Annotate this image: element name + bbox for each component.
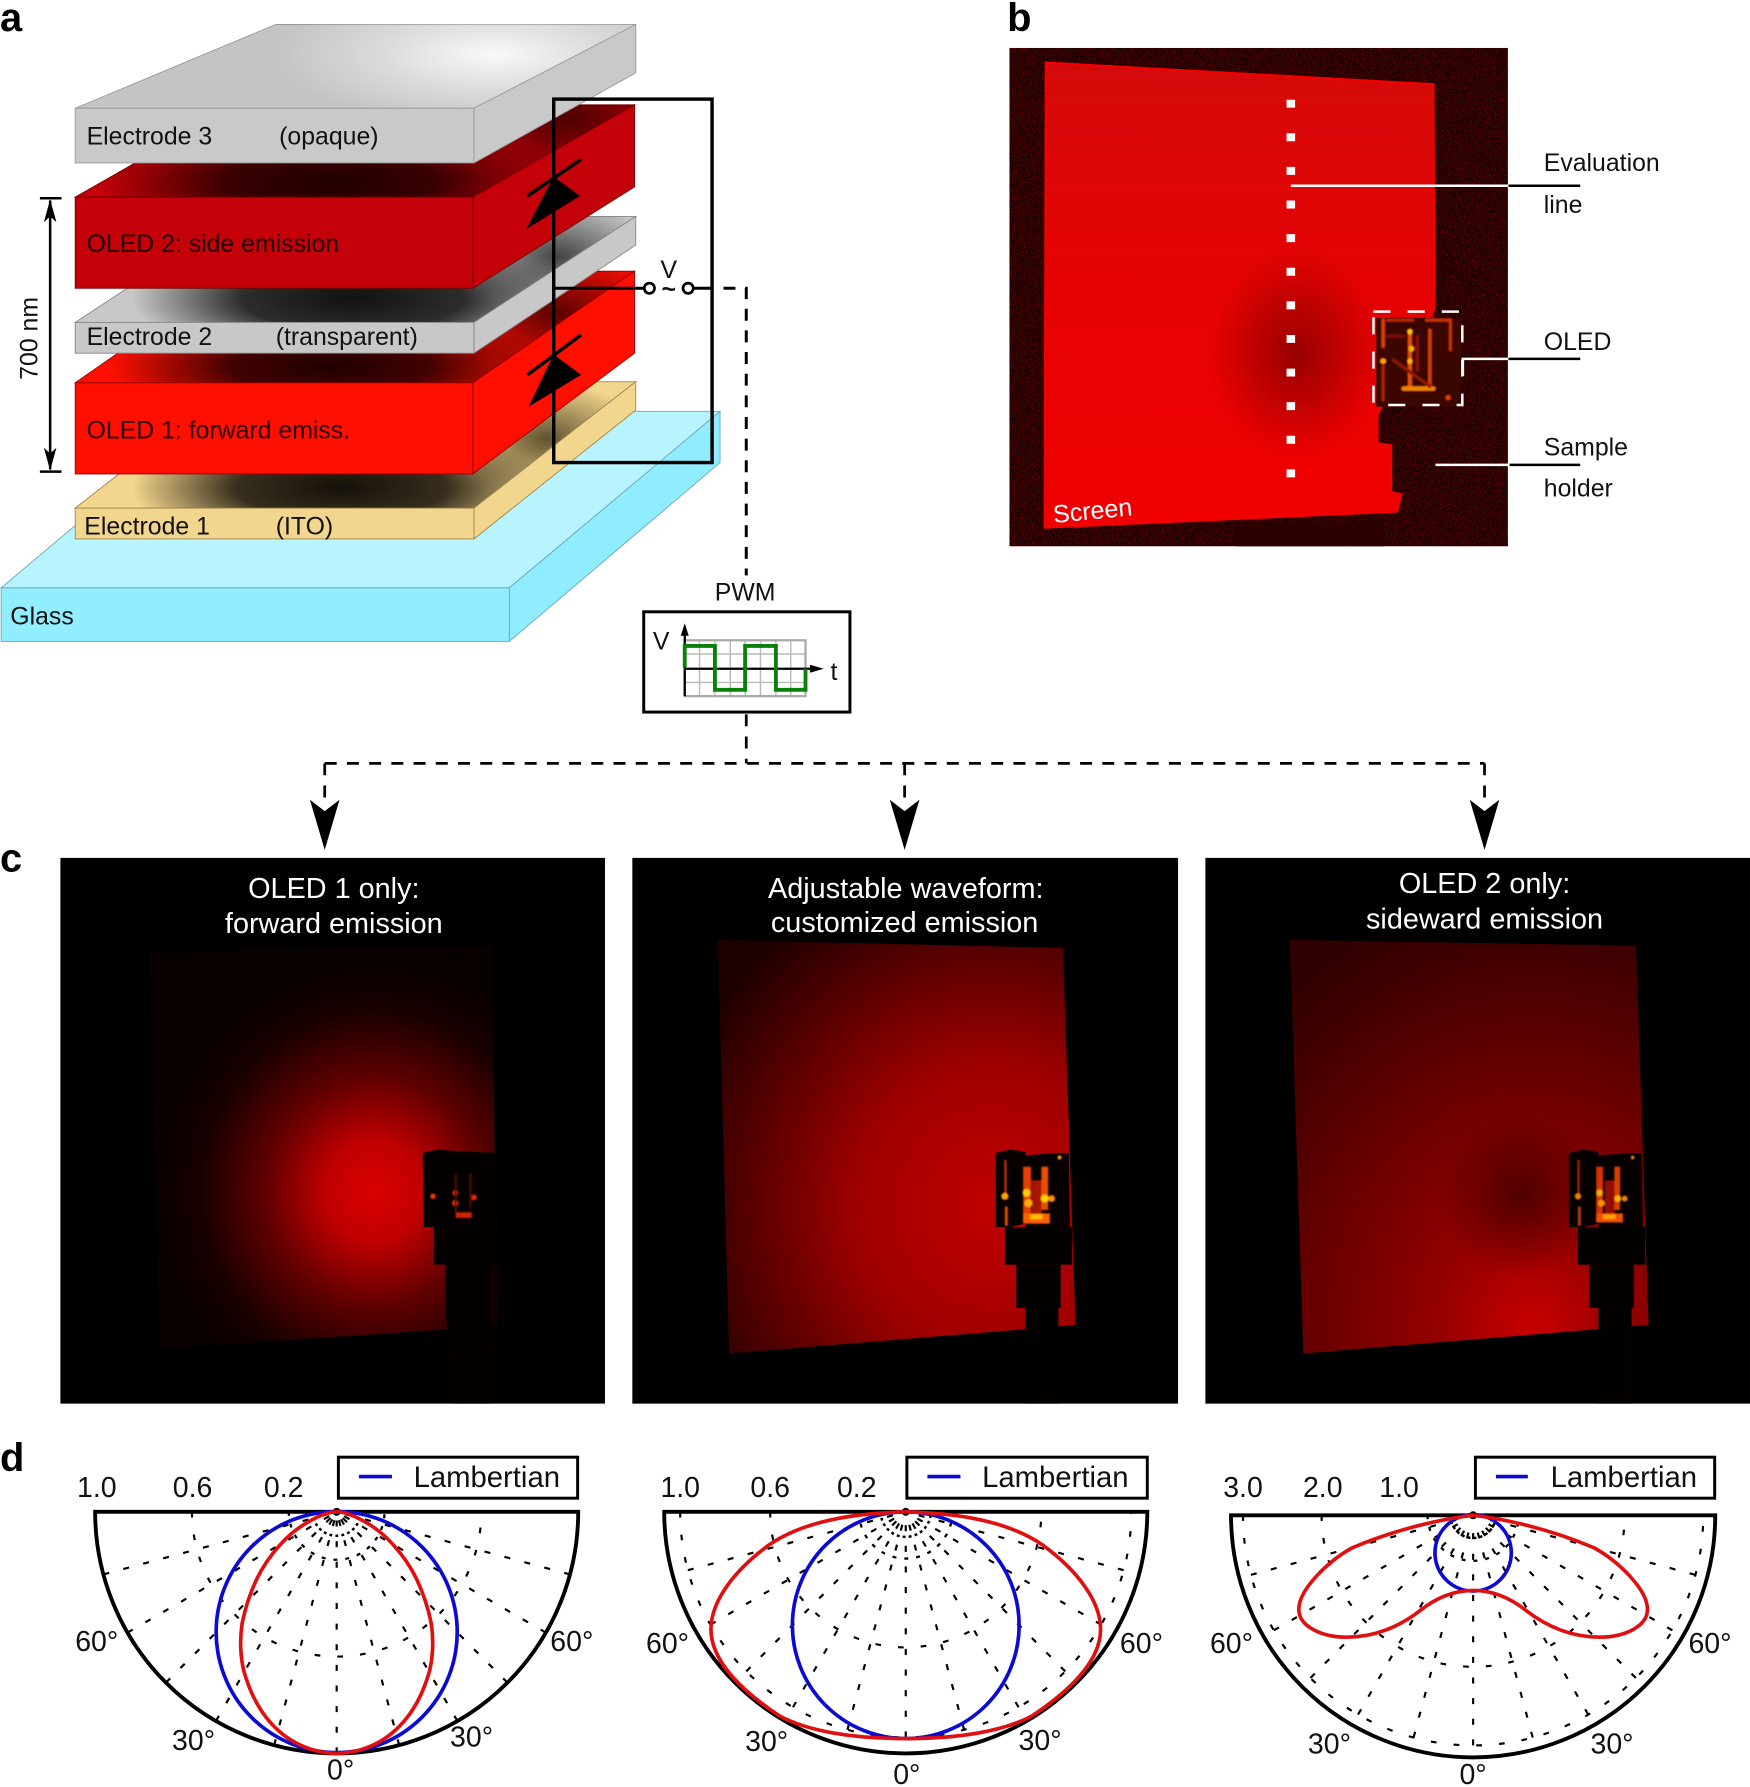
axis labels 2: 30° <box>1019 1725 1062 1757</box>
legend 1 <box>338 1457 578 1498</box>
axis labels 2: 60° <box>646 1628 689 1660</box>
axis labels 1: 60° <box>75 1626 118 1658</box>
outer frame 1 <box>95 1512 578 1753</box>
holder 2 <box>996 1150 1072 1404</box>
OLED device photo <box>1376 314 1461 407</box>
dashed box around OLED <box>1373 312 1462 405</box>
PWM box with waveform: t <box>831 659 838 686</box>
dimension: 700 nm: 700 nm <box>17 297 44 380</box>
circuit with diodes and voltage source <box>526 99 712 463</box>
circuit with diodes and voltage source: V <box>661 257 678 284</box>
legend 2 <box>907 1457 1147 1498</box>
circuit with diodes and voltage source: ~ <box>662 276 676 303</box>
measured curve 1 <box>241 1512 433 1753</box>
layer: electrode 2: Electrode 2 <box>87 324 212 351</box>
axis labels 3: 3.0 <box>1223 1472 1263 1504</box>
measured curve 3 <box>1299 1515 1647 1637</box>
panel c3: OLED 2 only photo: OLED 2 only: <box>1399 868 1570 900</box>
OLED device glow 3 <box>1575 1156 1634 1226</box>
panel label c: c <box>0 837 22 881</box>
legend 3 <box>1475 1457 1715 1498</box>
axis labels 3: 2.0 <box>1303 1472 1343 1504</box>
polar plot 2 <box>646 1457 1163 1787</box>
Lambertian curve 1 <box>216 1512 457 1753</box>
callout: sample holder: holder <box>1544 476 1613 503</box>
axis labels 2: 30° <box>745 1726 788 1758</box>
Lambertian curve 2 <box>792 1512 1019 1739</box>
polar grid 3 <box>1243 1511 1703 1745</box>
PWM box with waveform: V <box>653 628 670 655</box>
icon: diode OLED 2 <box>526 160 581 229</box>
polar plot 1 <box>75 1457 593 1787</box>
axis labels 3: 1.0 <box>1379 1472 1419 1504</box>
layer: electrode 3 <box>75 24 636 163</box>
callout: OLED <box>1463 329 1611 376</box>
panel c2: adjustable waveform photo: Adjustable waveform: <box>768 873 1043 905</box>
layer: OLED 2 <box>75 105 635 288</box>
axis labels 1 <box>75 1472 593 1787</box>
axis labels 2: 1.0 <box>660 1472 700 1504</box>
callout: OLED: OLED <box>1544 329 1611 356</box>
panel c2: adjustable waveform photo: customized emission <box>771 907 1038 939</box>
callout: sample holder: Sample <box>1544 435 1628 462</box>
layer: electrode 2 <box>75 216 636 353</box>
axis labels 1: 0° <box>327 1755 354 1787</box>
screen label: Screen <box>1052 493 1133 529</box>
axis labels 1: 0.2 <box>264 1472 303 1504</box>
layer: electrode 3: Electrode 3 <box>87 124 212 151</box>
arrow: to OLED 2 panel <box>1470 800 1499 850</box>
layer: electrode 1 <box>75 382 636 540</box>
callout: evaluation line: Evaluation <box>1544 150 1660 177</box>
arrow: to adjustable panel <box>890 800 919 850</box>
dashed distribution lines <box>325 714 1485 804</box>
PWM label: PWM <box>715 579 775 606</box>
evaluation line dots <box>1287 100 1295 477</box>
PWM box with waveform <box>644 612 850 712</box>
layer: glass: Glass <box>10 603 74 630</box>
axis labels 3: 60° <box>1688 1628 1732 1660</box>
panel label d: d <box>0 1436 24 1480</box>
layer: electrode 3: (opaque) <box>279 124 379 151</box>
dimension: 700 nm <box>17 198 62 472</box>
layer: electrode 1: Electrode 1 <box>84 513 210 540</box>
axis labels 1: 1.0 <box>77 1472 117 1504</box>
holder 1 <box>423 1150 501 1404</box>
panel c1: OLED 1 only photo: forward emission <box>225 908 443 940</box>
panel c1: OLED 1 only photo: OLED 1 only: <box>248 873 420 905</box>
axis labels 3: 30° <box>1308 1728 1351 1760</box>
Lambertian curve 3 <box>1435 1515 1511 1591</box>
panel b: photograph of setup <box>1009 48 1508 547</box>
icon: diode OLED 1 <box>528 335 581 407</box>
legend 3: Lambertian <box>1551 1461 1697 1494</box>
layer: electrode 2: (transparent) <box>276 324 418 351</box>
axis labels 3: 60° <box>1210 1628 1253 1660</box>
axis labels 2: 60° <box>1120 1628 1163 1660</box>
measured curve 2 <box>711 1512 1101 1739</box>
axis labels 2: 0.6 <box>750 1472 790 1504</box>
callout: sample holder <box>1436 435 1628 503</box>
axis labels 3: 30° <box>1590 1728 1634 1760</box>
panel c3: OLED 2 only photo <box>1205 858 1750 1404</box>
legend 1: Lambertian <box>414 1461 560 1494</box>
outer frame 2 <box>664 1512 1147 1753</box>
OLED device glow 2 <box>1001 1155 1062 1226</box>
axis labels 1: 30° <box>172 1725 215 1757</box>
axis labels 2: 0.2 <box>837 1472 877 1504</box>
axis labels 1: 60° <box>550 1626 593 1658</box>
polar grid 2 <box>680 1508 1131 1737</box>
polar grid 1 <box>103 1508 570 1753</box>
axis labels 1: 0.6 <box>173 1472 212 1504</box>
dashed connector to PWM <box>723 288 746 575</box>
axis labels 1: 30° <box>450 1722 493 1754</box>
layer: electrode 1: (ITO) <box>276 513 333 540</box>
OLED device glow 1 <box>430 1173 477 1218</box>
panel c2: adjustable waveform photo <box>632 858 1178 1404</box>
arrow: to OLED 1 panel <box>310 800 340 850</box>
layer: glass <box>1 411 720 641</box>
panel c3: OLED 2 only photo: sideward emission <box>1366 904 1603 936</box>
axis labels 3 <box>1210 1472 1732 1787</box>
layer: OLED 1: OLED 1: forward emiss. <box>87 418 350 445</box>
axis labels 2 <box>646 1472 1163 1787</box>
callout: evaluation line: line <box>1544 192 1582 219</box>
callout: evaluation line <box>1291 150 1660 219</box>
screen <box>1045 63 1434 527</box>
legend 2: Lambertian <box>982 1461 1129 1494</box>
polar plot 3 <box>1210 1457 1732 1787</box>
outer frame 3 <box>1231 1515 1715 1757</box>
panel c1: OLED 1 only photo <box>60 858 605 1404</box>
holder 3 <box>1569 1150 1645 1404</box>
panel a: OLED layer stack <box>1 24 720 641</box>
layer: OLED 2: OLED 2: side emission <box>87 231 339 258</box>
layer: OLED 1 <box>75 271 635 474</box>
